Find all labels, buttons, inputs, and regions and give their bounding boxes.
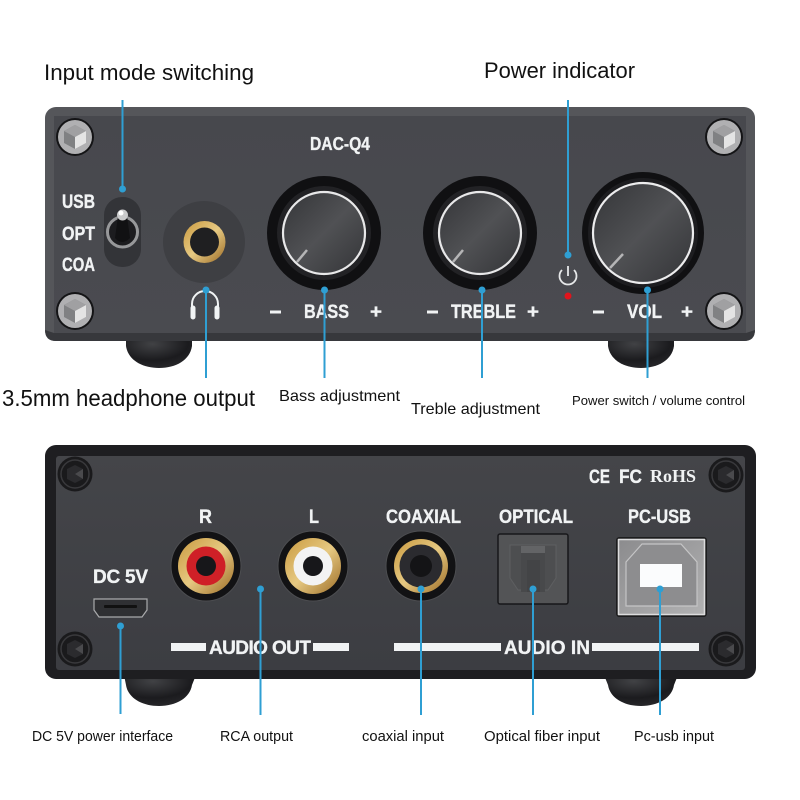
certification marks [589,466,696,488]
label: coaxial input: coaxial input [362,729,444,745]
PC-USB port [617,538,706,616]
toggle switch [104,197,141,267]
L label: L [309,507,319,528]
headphone jack [163,201,245,283]
volume label: + [681,302,693,323]
audio out label: AUDIO OUT [209,638,311,659]
label: DC power: DC 5V power interface [32,729,173,745]
PC-USB label: PC-USB [628,507,691,528]
screw: rear bottom right [708,632,744,666]
audio in label [394,638,699,659]
callout line: headphone [202,286,210,378]
model name: DAC-Q4 [310,134,370,154]
foot: rear right [604,675,678,706]
RCA jack: right red [171,531,241,601]
callout line: optical [530,586,536,715]
callout line: power indicator [564,100,572,258]
foot: front left [126,338,192,368]
screw: top left [56,118,94,156]
callout line: PC-USB [656,586,664,715]
bass label: + [370,302,382,323]
R label: R [199,507,212,528]
panel: front of DAC [45,107,755,341]
label: power indicator: Power indicator [484,58,635,83]
COAXIAL label: COAXIAL [386,507,461,528]
label: headphone output: 3.5mm headphone output [2,385,256,411]
screw: rear bottom left [58,632,92,666]
OPTICAL label: OPTICAL [499,507,573,528]
knob: bass [267,176,381,290]
icon: power [559,266,576,285]
foot: rear left [124,675,196,706]
treble label: + [527,302,539,323]
volume label [593,302,693,323]
audio in label: AUDIO IN [504,638,590,659]
screw: bottom left [56,292,94,330]
certification marks: RoHS [650,466,696,486]
icon: headphones [191,291,219,319]
coaxial jack [386,531,456,601]
callout line: RCA [257,586,264,715]
screw: bottom right [705,292,743,330]
knob: volume [582,172,704,294]
label: optical input: Optical fiber input [484,729,600,745]
label: treble adjustment: Treble adjustment [411,401,541,418]
RCA jack: left white [278,531,348,601]
callout line: DC power [117,622,124,714]
screw: rear top left [58,456,92,492]
input mode labels: COA [62,255,95,276]
callout line: treble [478,286,486,378]
treble label: TREBLE [451,302,516,323]
foot: front right [608,338,674,368]
knob: treble [423,176,537,290]
certification marks: FC [619,467,642,488]
label: volume control: Power switch / volume control [572,393,745,408]
bass label: BASS [304,302,349,323]
callout line: bass [321,286,328,378]
label: PC-USB input: Pc-usb input [634,729,714,745]
label: RCA output: RCA output [220,729,293,745]
power LED [564,292,572,300]
optical port [498,534,568,604]
panel: rear of DAC [45,445,756,679]
callout line: input mode [119,100,126,192]
callout line: volume [644,286,651,378]
input mode labels: USB [62,192,95,213]
bass label [270,302,382,323]
screw: top right [705,118,743,156]
input mode labels [62,192,95,276]
input mode labels: OPT [62,224,95,245]
callout line: coaxial [418,586,424,715]
certification marks: CE [589,467,610,488]
micro USB port [94,599,147,617]
volume label: VOL [627,302,662,323]
label: input mode switching: Input mode switching [44,60,254,85]
audio out label [171,638,349,659]
DC label: DC 5V [93,567,148,588]
label: bass adjustment: Bass adjustment [279,388,401,405]
screw: rear top right [708,458,744,492]
treble label [427,302,539,323]
